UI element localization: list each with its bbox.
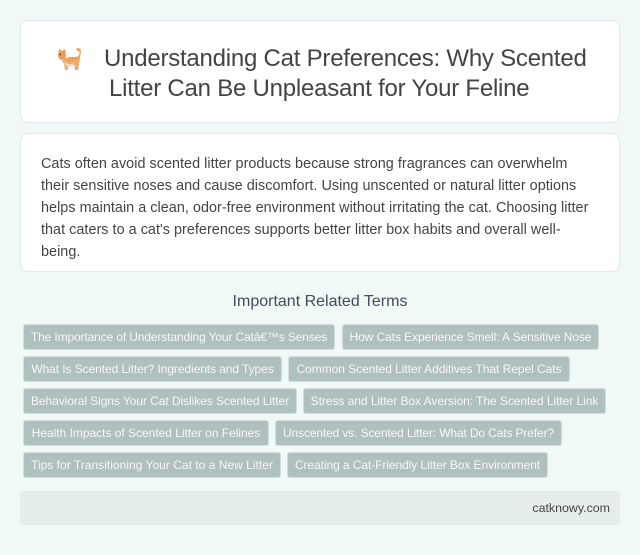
tag (303, 388, 606, 414)
title line 2: Litter Can Be Unpleasant for Your Feline (109, 75, 529, 102)
tag: The Importance of Understanding Your Catâ€™s Senses (31, 330, 327, 344)
heading: related terms: Important Related Terms (233, 293, 407, 310)
tag (288, 356, 570, 382)
tag: What Is Scented Litter? Ingredients and Types (31, 362, 274, 376)
tag: Stress and Litter Box Aversion: The Scented Litter Link (311, 394, 598, 408)
footer bar (20, 491, 620, 525)
tag (342, 324, 599, 350)
panel: description (20, 133, 620, 272)
tag: Tips for Transitioning Your Cat to a New Litter (31, 458, 273, 472)
tag: How Cats Experience Smell: A Sensitive Nose (349, 330, 592, 344)
tag (23, 452, 281, 478)
tag: Common Scented Litter Additives That Repel Cats (297, 362, 561, 376)
tag (23, 324, 335, 350)
tag (23, 388, 297, 414)
icon: cat (58, 48, 81, 70)
description text: being. (41, 244, 80, 260)
footer text: catknowy.com (532, 501, 610, 515)
description text: that caters to a cat's preferences supports better litter box habits and overall well- (41, 222, 561, 238)
tag: Behavioral Signs Your Cat Dislikes Scented Litter (31, 394, 289, 408)
tag (23, 356, 282, 382)
tag (287, 452, 548, 478)
title line 1: Understanding Cat Preferences: Why Scented (104, 45, 587, 72)
tag: Unscented vs. Scented Litter: What Do Cats Prefer? (283, 426, 554, 440)
tag (275, 420, 562, 446)
tag: Creating a Cat-Friendly Litter Box Environment (295, 458, 540, 472)
panel: title card (20, 20, 620, 123)
description text: Cats often avoid scented litter products because strong fragrances can overwhelm (41, 156, 567, 172)
tag: Health Impacts of Scented Litter on Felines (32, 426, 260, 440)
description text: their sensitive noses and cause discomfort. Using unscented or natural litter options (41, 178, 576, 194)
tag (23, 420, 269, 446)
description text: helps maintain a clean, odor-free environment without irritating the cat. Choosing litter (41, 200, 588, 216)
related term tags (23, 324, 606, 478)
description text (41, 156, 588, 260)
